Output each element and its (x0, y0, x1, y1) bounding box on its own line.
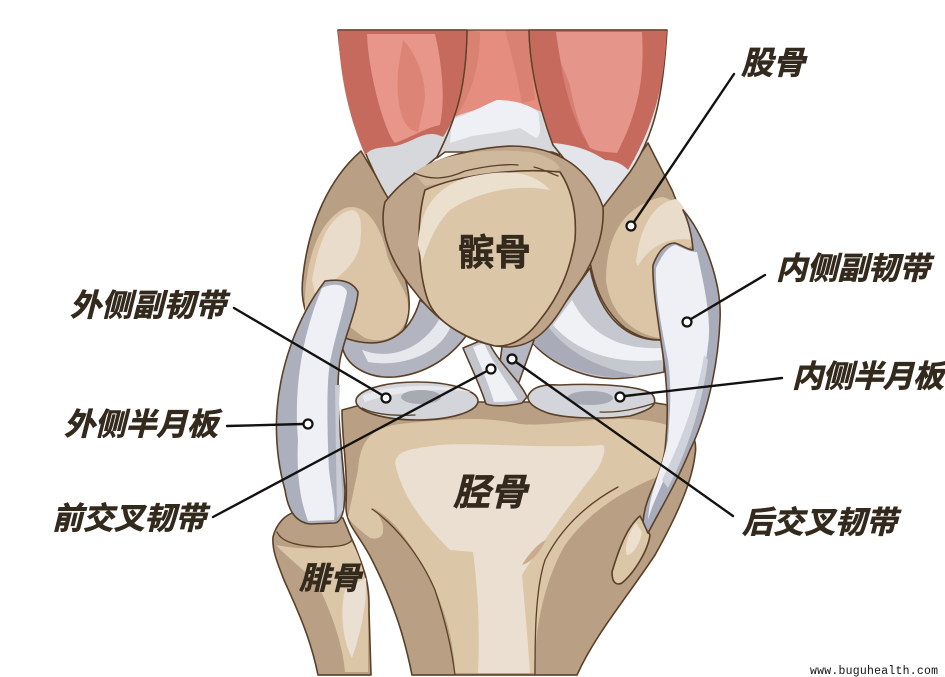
muscle: right head (529, 30, 667, 207)
label: lateral collateral ligament (70, 288, 390, 402)
label: femur (626, 45, 808, 230)
label: lateral meniscus (64, 407, 312, 442)
fibula (273, 512, 371, 675)
label: medial collateral ligament: 内侧副韧带 (776, 251, 935, 286)
label: lateral meniscus: 外侧半月板 (64, 407, 223, 442)
muscle: left head (338, 30, 467, 198)
lateral collateral ligament (276, 280, 358, 524)
tibia (342, 402, 696, 675)
cruciate ligaments (463, 338, 534, 406)
cartilage: left arc (342, 300, 466, 377)
tibia: highlight (395, 444, 604, 673)
quadriceps muscle group (338, 30, 667, 207)
fibula: bone silhouette (273, 512, 371, 675)
label: fibula: 腓骨 (299, 561, 364, 596)
muscle: central tendon (437, 80, 560, 158)
label: femur: 股骨 (741, 45, 808, 81)
label: lateral collateral ligament: 外侧副韧带 (70, 288, 231, 323)
label: medial meniscus (616, 359, 945, 402)
label: anterior cruciate ligament: 前交叉韧带 (52, 501, 211, 536)
lateral meniscus (356, 382, 478, 420)
cartilage: right arc (530, 268, 664, 379)
label: patella: 髌骨 (458, 232, 531, 273)
posterior cruciate ligament (500, 340, 534, 388)
tibia: small oval notch (612, 516, 650, 584)
meniscus (356, 382, 655, 420)
tibia: lit surface (348, 419, 669, 673)
label: posterior cruciate ligament: 后交叉韧带 (742, 505, 902, 540)
label: medial meniscus: 内侧半月板 (792, 359, 945, 394)
anterior cruciate ligament (463, 338, 527, 406)
patella: outer rim (383, 146, 603, 347)
medial collateral ligament (643, 210, 720, 533)
femur: left condyle (302, 151, 409, 349)
label: tibia: 胫骨 (453, 472, 530, 513)
medial meniscus (528, 384, 655, 418)
label: posterior cruciate ligament (508, 354, 902, 540)
patella: inner face (419, 171, 575, 346)
patella (383, 146, 603, 347)
femur: right condyle (590, 143, 696, 340)
tibia: bone silhouette (342, 402, 696, 675)
label: medial collateral ligament (682, 251, 935, 326)
femur (302, 143, 696, 349)
cartilage: femoral condyle arcs (342, 268, 664, 379)
label: anterior cruciate ligament (52, 364, 496, 536)
